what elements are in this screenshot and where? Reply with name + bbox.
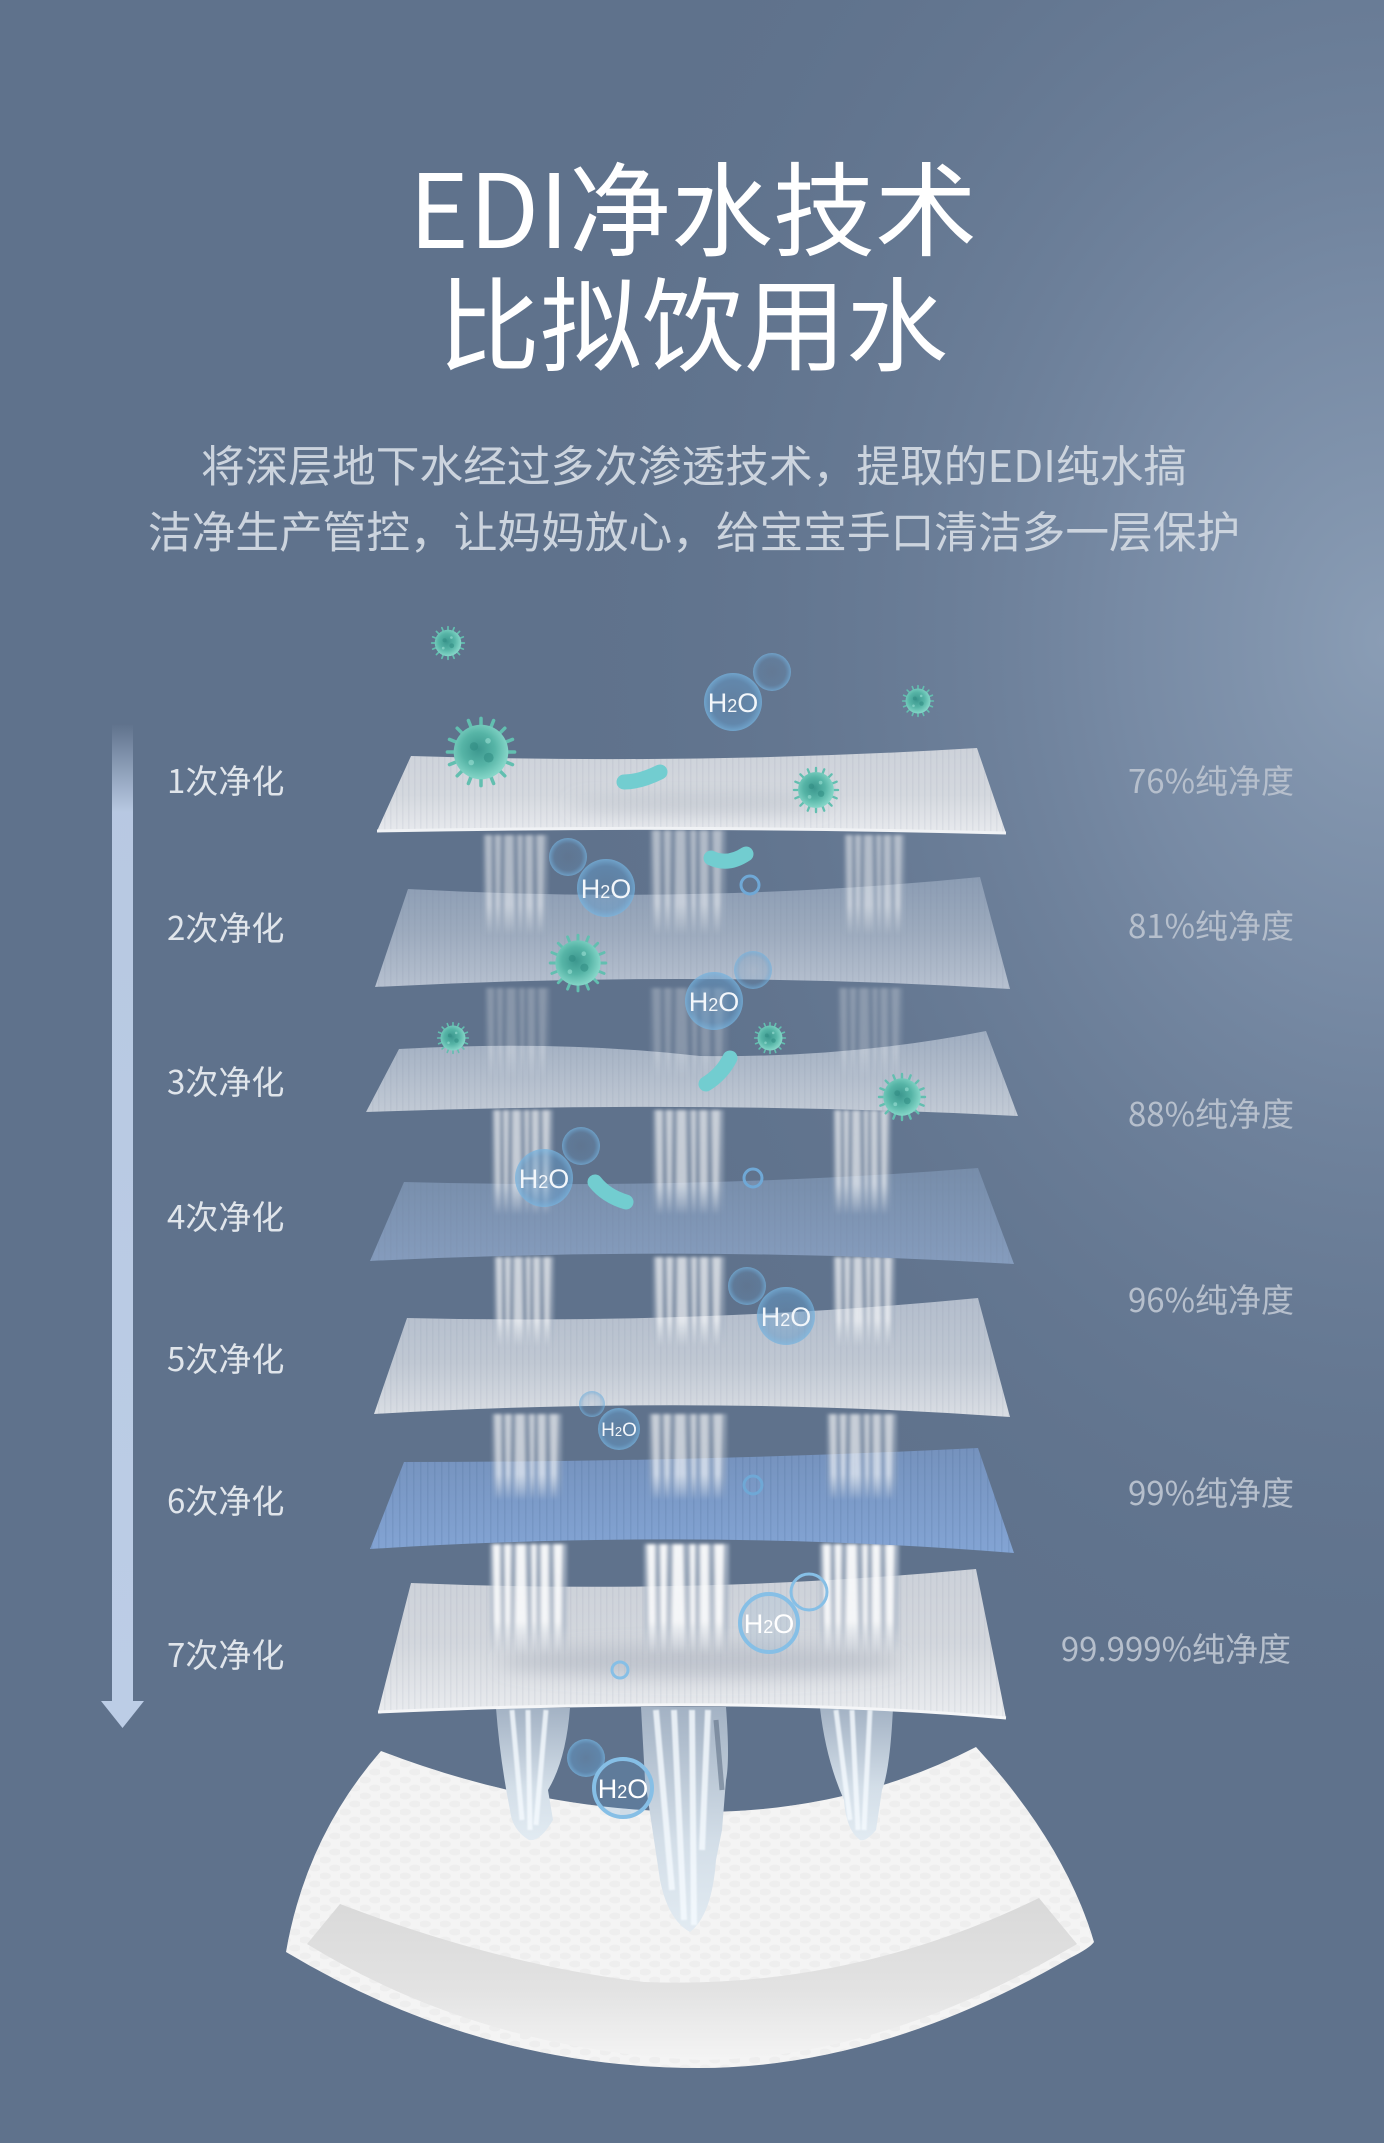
title: EDI净水技术: [409, 131, 977, 278]
subtitle text: 洁净生产管控，让妈妈放心，给宝宝手口清洁多一层保护: [148, 497, 1240, 561]
water columns 3 to 4: [492, 1110, 891, 1215]
stage labels: 7次净化: [167, 1629, 284, 1677]
H2O bubble 5: H2O: [761, 1302, 811, 1332]
purity labels: 99%纯净度: [1128, 1467, 1294, 1515]
title: 比拟饮用水: [438, 246, 948, 393]
layer 6: [370, 1448, 1014, 1553]
H2O bubble 6: H2O: [601, 1420, 637, 1441]
viruses: [432, 627, 933, 1120]
layer 2: [375, 877, 1010, 989]
purity labels: [1061, 755, 1294, 1671]
layer 3: [366, 1031, 1018, 1116]
bacteria: [595, 772, 746, 1202]
wipe: [286, 1747, 1094, 2068]
water columns 2 to 3: [485, 988, 903, 1078]
H2O bubble 4: [515, 1127, 762, 1207]
subtitle text: [148, 431, 1240, 561]
purity labels: 81%纯净度: [1128, 900, 1294, 948]
subtitle text: 将深层地下水经过多次渗透技术，提取的EDI纯水搞: [201, 431, 1187, 495]
purity labels: 76%纯净度: [1128, 755, 1294, 803]
H2O bubble 4: H2O: [519, 1164, 569, 1194]
H2O bubble 8: H2O: [598, 1774, 648, 1804]
H2O bubble 2: [549, 838, 759, 917]
stage labels: [167, 755, 284, 1677]
purity labels: 96%纯净度: [1128, 1274, 1294, 1322]
H2O bubble 1: H2O: [708, 688, 758, 718]
water stream left: [496, 1708, 570, 1840]
water stream right: [820, 1708, 893, 1840]
water columns 6 to 7: [490, 1544, 899, 1654]
H2O bubble 7: H2O: [744, 1609, 794, 1639]
purity labels: 88%纯净度: [1128, 1088, 1294, 1136]
arrow: purification direction: [101, 724, 144, 1728]
H2O bubble 3: H2O: [689, 987, 739, 1017]
H2O bubble 3: [685, 951, 772, 1030]
layer 7: [378, 1569, 1006, 1718]
H2O bubble 2: H2O: [581, 874, 631, 904]
stage labels: 6次净化: [167, 1475, 284, 1523]
stage labels: 4次净化: [167, 1191, 284, 1239]
stage labels: 2次净化: [167, 902, 284, 950]
layer 1: [377, 748, 1006, 833]
water columns 4 to 5: [494, 1257, 895, 1347]
water columns 5 to 6: [492, 1414, 897, 1500]
H2O bubble 1: [704, 653, 791, 731]
stage labels: 3次净化: [167, 1056, 284, 1104]
water stream centre: [641, 1707, 728, 1932]
H2O bubble 8: [567, 1739, 652, 1817]
purity labels: 99.999%纯净度: [1061, 1623, 1291, 1671]
H2O bubble 7: [612, 1574, 827, 1678]
layer 5: [374, 1298, 1010, 1417]
stage labels: 1次净化: [167, 755, 284, 803]
H2O bubble 5: [728, 1267, 815, 1345]
stage labels: 5次净化: [167, 1333, 284, 1381]
layer 4: [370, 1168, 1014, 1264]
water columns 1 to 2: [483, 830, 905, 935]
title: [409, 131, 977, 393]
H2O bubble 6: [579, 1391, 762, 1494]
